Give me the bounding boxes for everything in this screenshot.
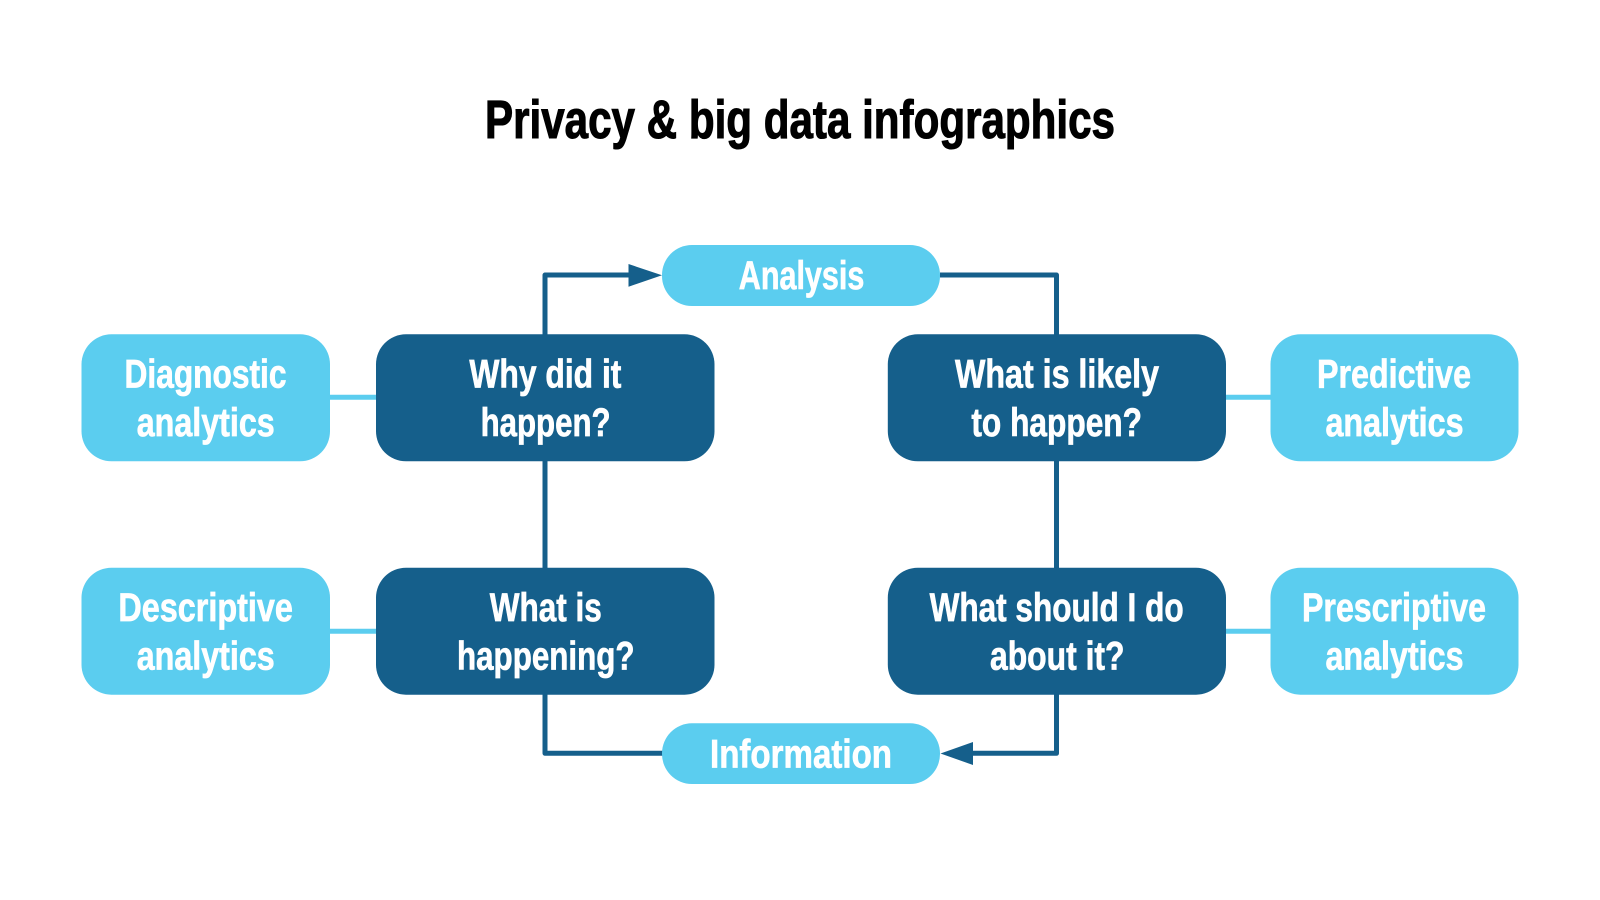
box: What is likely to happen: to happen? [971, 401, 1142, 445]
arrow: from Why did it happen up to Analysis [545, 264, 662, 335]
box: Diagnostic analytics [82, 334, 330, 461]
box: What is likely to happen: What is likely [955, 353, 1160, 397]
connector: What should I do to What is likely [1054, 460, 1059, 568]
connector: What should I do to Prescriptive [1226, 629, 1271, 634]
pill: Information: Information [710, 732, 892, 776]
box: Prescriptive analytics [1270, 568, 1518, 695]
box: Predictive analytics: Predictive [1317, 353, 1471, 397]
box: Descriptive analytics: Descriptive [118, 586, 293, 630]
box: Prescriptive analytics: Prescriptive [1302, 586, 1486, 630]
box: What is happening [376, 568, 714, 695]
box: Diagnostic analytics: analytics [137, 401, 275, 445]
connector: Diagnostic to Why did it happen [330, 395, 376, 400]
box: What should I do about it [888, 568, 1226, 695]
box: Descriptive analytics: analytics [137, 634, 275, 678]
box: What is happening: What is [490, 586, 602, 630]
box: Prescriptive analytics: analytics [1326, 634, 1464, 678]
box: What is happening: happening? [457, 634, 634, 678]
box: Diagnostic analytics: Diagnostic [124, 353, 286, 397]
pill: Information [662, 723, 940, 784]
pill: Analysis [662, 245, 940, 306]
box: What is likely to happen [888, 334, 1226, 461]
arrow: from What should I do to Information [940, 694, 1056, 765]
box: Predictive analytics: analytics [1326, 401, 1464, 445]
box: Descriptive analytics [82, 568, 330, 695]
box: Why did it happen: Why did it [469, 353, 621, 397]
connector: Analysis to What is likely to happen [940, 275, 1056, 335]
box: What should I do about it: about it? [990, 634, 1124, 678]
connector: What is likely to Predictive [1226, 395, 1271, 400]
pill: Analysis: Analysis [739, 254, 864, 298]
connector: What is happening to Why did it happen [542, 460, 548, 568]
box: Why did it happen [376, 334, 714, 461]
title: Privacy & big data infographics [485, 90, 1115, 150]
connector: What is happening to Information [545, 694, 663, 753]
box: Why did it happen: happen? [481, 401, 611, 445]
connector: Descriptive to What is happening [330, 629, 376, 634]
box: Predictive analytics [1270, 334, 1518, 461]
box: What should I do about it: What should I do [930, 586, 1184, 630]
